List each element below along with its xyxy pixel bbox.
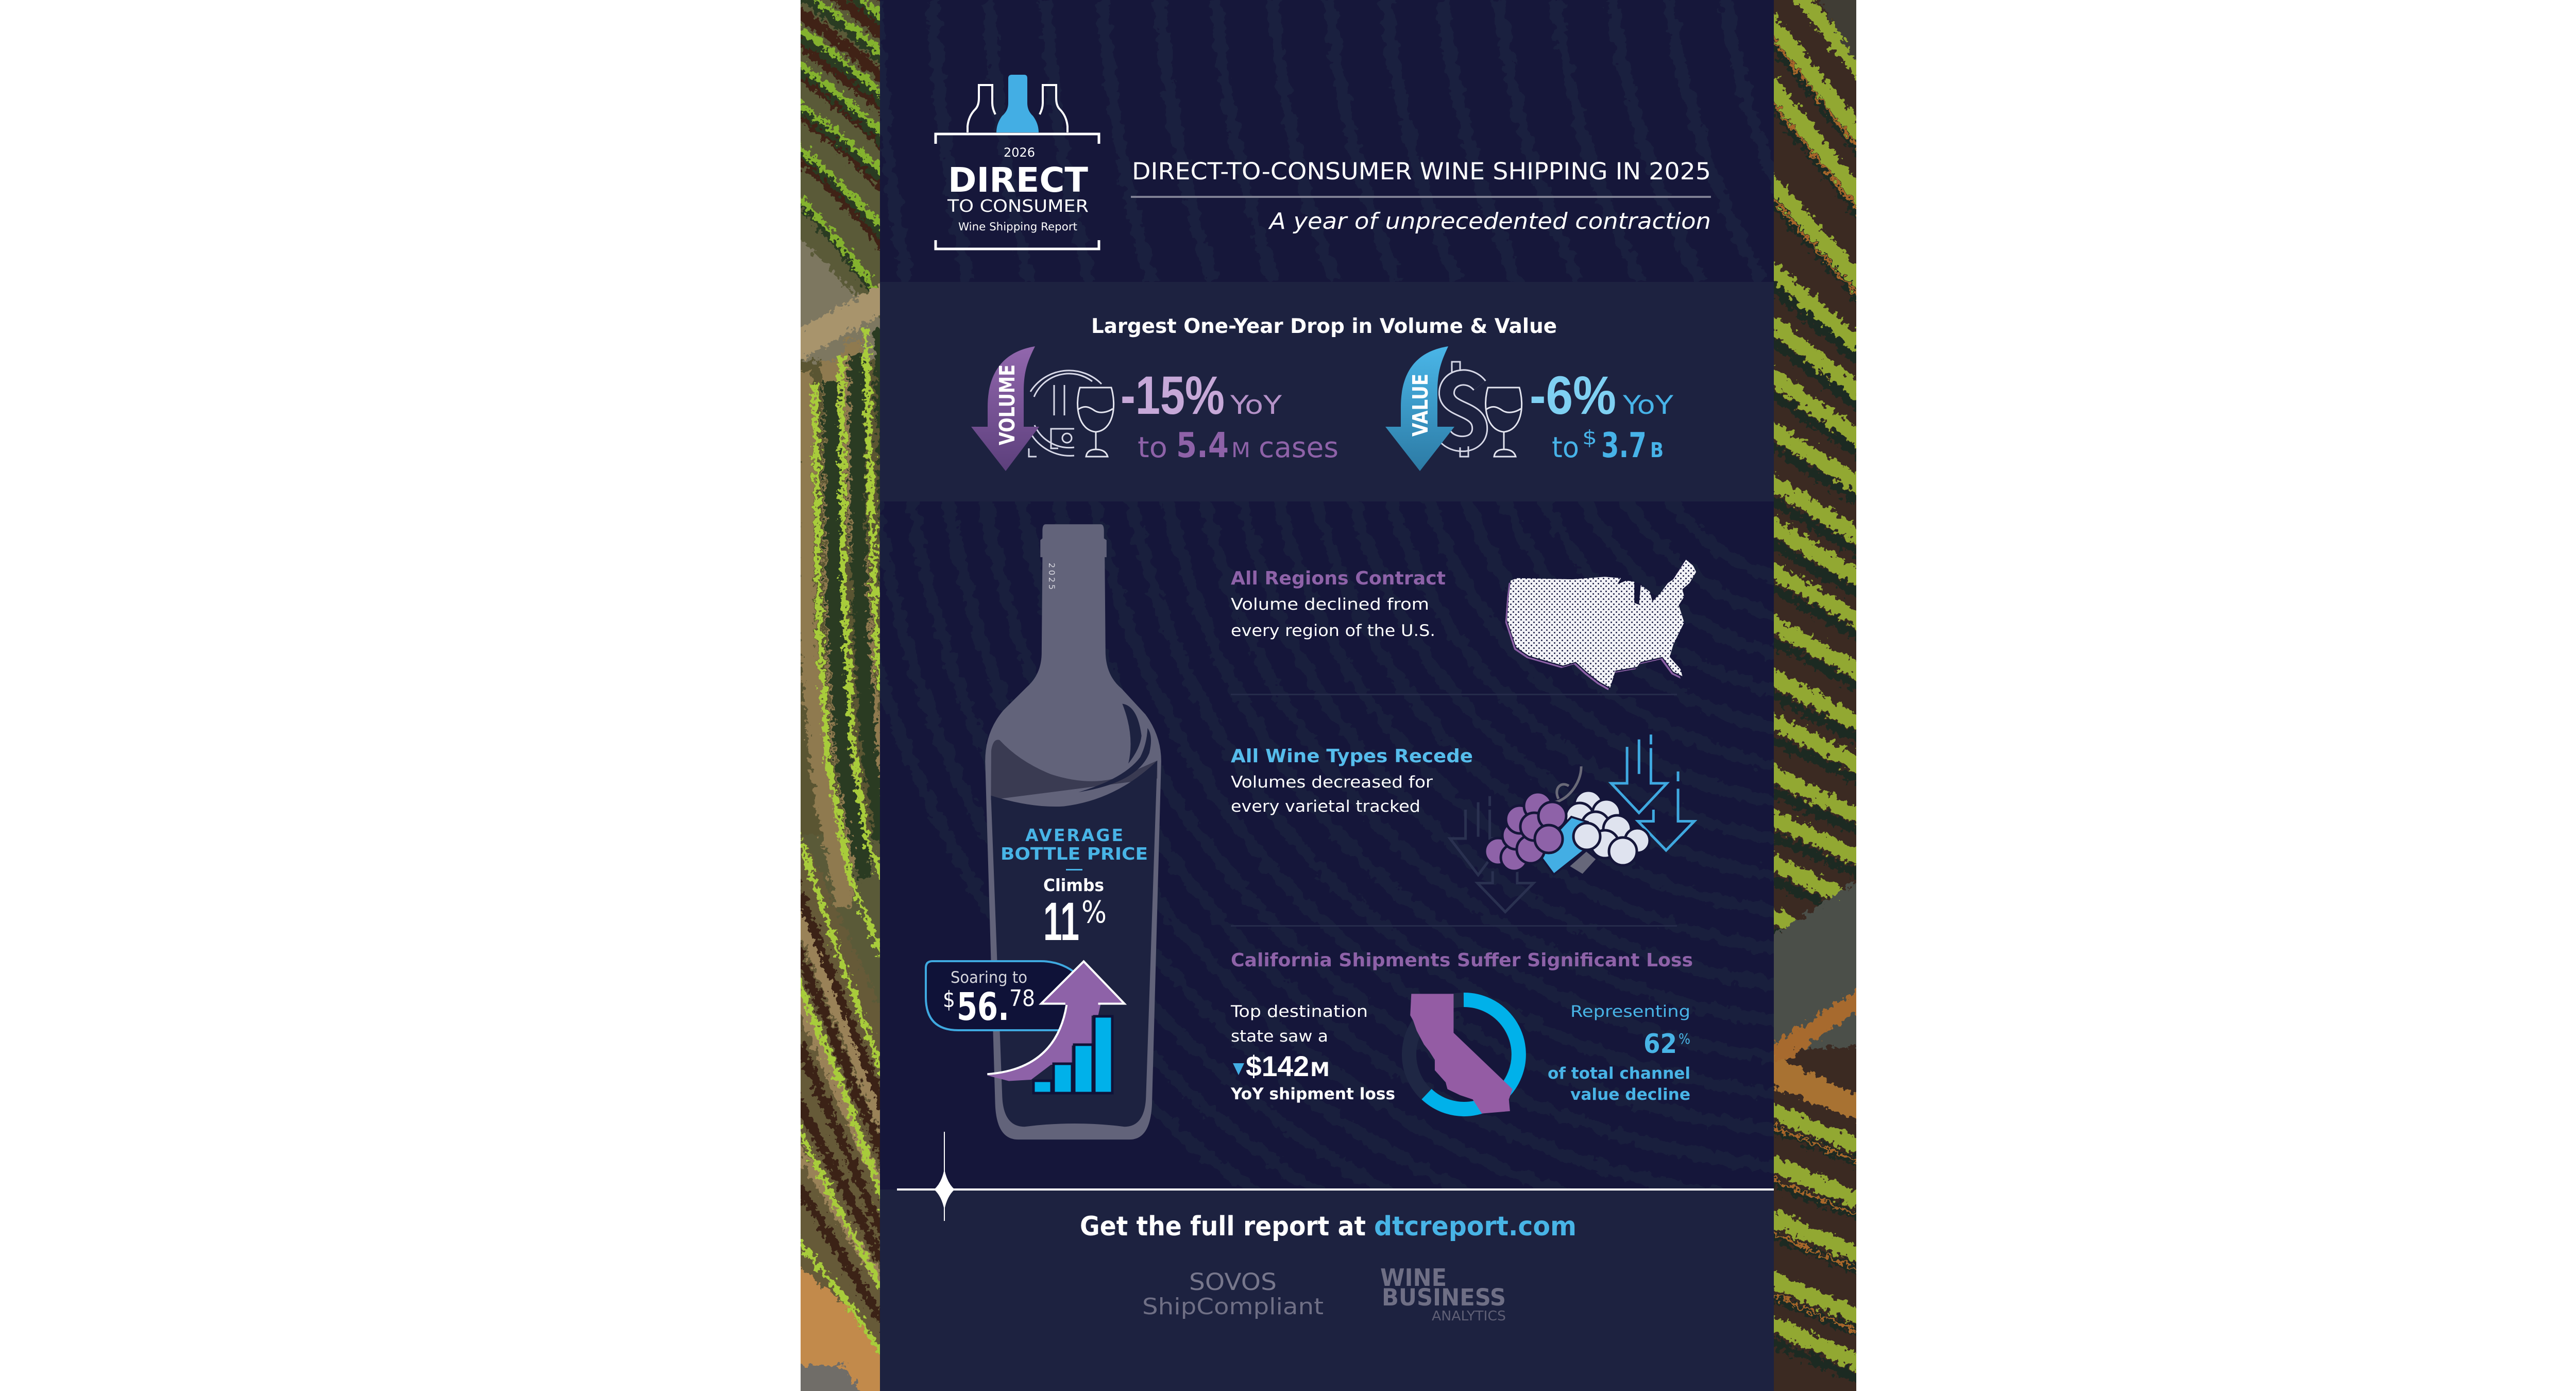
callout dollar sign: $ [943, 986, 955, 1013]
subtitle: A year of unprecedented contraction [1268, 208, 1711, 234]
stat: to $3.7B [1552, 425, 1664, 465]
percent sign: % [1081, 894, 1107, 930]
body: volume declined: Volume declined from [1231, 595, 1429, 614]
left vineyard photo strip [801, 0, 880, 1391]
climbs label: Climbs [1043, 875, 1104, 895]
call to action [1080, 1211, 1577, 1242]
logo bottom bracket [936, 240, 1099, 249]
heading: California: California Shipments Suffer Significant Loss [1231, 950, 1693, 971]
main vineyard texture [880, 501, 1774, 1188]
icon: down triangle [1233, 1063, 1244, 1075]
heading: all regions: All Regions Contract [1231, 568, 1446, 589]
arrow: volume down [971, 346, 1039, 471]
right vineyard photo strip [1774, 0, 1856, 1391]
donut chart: 62 percent [1409, 1000, 1519, 1109]
callout: soaring to price [926, 961, 1077, 1030]
footer vertical rule [944, 1132, 945, 1221]
stat: to 5.4M cases: 5.4 [1176, 425, 1229, 465]
body: every region: every region of the U.S. [1231, 622, 1435, 640]
logo: Wine Business Analytics: ANALYTICS [1432, 1309, 1506, 1324]
icon: blue down arrows [1611, 734, 1694, 850]
panel: wine bottle [926, 524, 1161, 1139]
call to action url: dtcreport.com [1374, 1211, 1577, 1242]
body: top destination: Top destination [1230, 1002, 1368, 1021]
call to action lead-in: Get the full report at [1080, 1211, 1366, 1242]
stat: value minus 6 percent: -6% [1530, 365, 1616, 426]
logo top bracket [936, 134, 1099, 144]
stat percent sign: % [1679, 1030, 1690, 1047]
icon: wine glass [1486, 388, 1522, 457]
text: representing: Representing [1570, 1002, 1690, 1021]
body: every varietal: every varietal tracked [1231, 797, 1420, 816]
stat unit: YoY: YoY [1230, 390, 1282, 420]
body: state saw a: state saw a [1231, 1027, 1328, 1046]
logo: Sovos ShipCompliant: ShipCompliant [1142, 1294, 1324, 1320]
title: DIRECT-TO-CONSUMER WINE SHIPPING IN 2025 [1132, 158, 1711, 185]
arrow: rising price [987, 961, 1124, 1081]
arrow: value down [1385, 346, 1454, 471]
stat: to $3.7B: 3.7 [1601, 425, 1647, 465]
logo: Wine Business Analytics: BUSINESS [1382, 1284, 1506, 1311]
icon: grape tendril [1552, 766, 1581, 802]
panel: textured main background [880, 501, 1774, 1189]
logo words TO CONSUMER: TO CONSUMER [947, 196, 1089, 216]
logo words Wine Shipping Report: Wine Shipping Report [958, 221, 1077, 233]
stat: to $3.7B: B [1650, 439, 1664, 462]
average label line 1: AVERAGE [1025, 825, 1123, 845]
bottle glass highlights [1078, 703, 1151, 792]
icon: front white grape [1573, 823, 1600, 850]
header vineyard texture [880, 0, 1774, 282]
map: United States [1505, 560, 1696, 690]
footer diamond [934, 1169, 955, 1210]
divider [1231, 925, 1677, 927]
title divider [1131, 196, 1711, 198]
bottle wine fill [991, 761, 1157, 1127]
bar chart: rising prices [1033, 1016, 1112, 1093]
icon: dollar sign [1445, 362, 1480, 457]
stat unit: M: M [1310, 1059, 1330, 1081]
panel: textured header background [880, 0, 1774, 282]
bottle silhouette [985, 524, 1161, 1139]
heading: largest drop: Largest One-Year Drop in Volume & Value [1091, 315, 1557, 338]
stat: to 5.4M cases: to [1138, 431, 1167, 464]
stat: to 5.4M cases: M [1231, 439, 1250, 462]
logo year: 2026 [1004, 145, 1035, 160]
stat: 62: 62 [1643, 1029, 1677, 1060]
body: volumes decreased: Volumes decreased for [1231, 773, 1433, 792]
stat: $142M: $142 [1246, 1050, 1309, 1082]
stat: to $3.7B: $ [1582, 426, 1597, 449]
icon: three bottles [968, 75, 1067, 132]
logo: Wine Business Analytics [1380, 1264, 1506, 1324]
map: California [1410, 994, 1513, 1114]
panel: footer band [880, 1189, 1774, 1391]
panel: volume and value band [880, 282, 1774, 501]
stat: to 5.4M cases: cases [1259, 431, 1338, 464]
logo: Sovos ShipCompliant [1142, 1268, 1324, 1320]
stat: to $3.7B: to [1552, 431, 1579, 464]
average label line 2: BOTTLE PRICE [1001, 844, 1148, 864]
footer horizontal rule [897, 1188, 1774, 1191]
text: of total channel: of total channel [1548, 1064, 1690, 1083]
icon: blue grape leaf [1538, 817, 1588, 875]
callout price cents: 78 [1009, 985, 1035, 1012]
arrow label: value: VALUE [1408, 374, 1433, 437]
text: value decline: value decline [1570, 1085, 1690, 1104]
divider [1231, 694, 1677, 695]
section: California shipments [1230, 950, 1693, 1114]
logo: Sovos ShipCompliant: SOVOS [1189, 1268, 1277, 1296]
stat: value minus 6 percent [1530, 365, 1674, 426]
heading: all wine types: All Wine Types Recede [1231, 746, 1473, 767]
logo word DIRECT: DIRECT [948, 160, 1088, 200]
bottle wine shading [991, 740, 1157, 800]
icon: barrel [1029, 371, 1101, 457]
icon: faded down arrows [1450, 796, 1533, 912]
body: YoY shipment loss: YoY shipment loss [1230, 1085, 1395, 1103]
stat: to 5.4M cases [1138, 425, 1338, 465]
logo: Direct to Consumer report [936, 75, 1099, 249]
logo: Wine Business Analytics: WINE [1380, 1264, 1447, 1292]
icon: wine glass [1078, 388, 1114, 457]
icon: grey grape leaf [1568, 850, 1597, 875]
short divider [1066, 869, 1082, 870]
arrow label: volume: VOLUME [995, 364, 1020, 445]
bottle neck year: 2025 [1047, 563, 1057, 590]
section: all regions contract [1231, 560, 1696, 690]
stat: volume minus 15 percent: -15% [1121, 365, 1225, 426]
icon: purple grapes [1485, 792, 1566, 871]
stat unit: YoY: YoY [1622, 390, 1674, 420]
callout caption: Soaring to [951, 968, 1027, 987]
callout price dollars: 56. [957, 985, 1009, 1029]
icon: white grapes [1566, 791, 1650, 865]
section: all wine types recede [1231, 734, 1694, 912]
percent figure 11: 11 [1043, 892, 1079, 952]
